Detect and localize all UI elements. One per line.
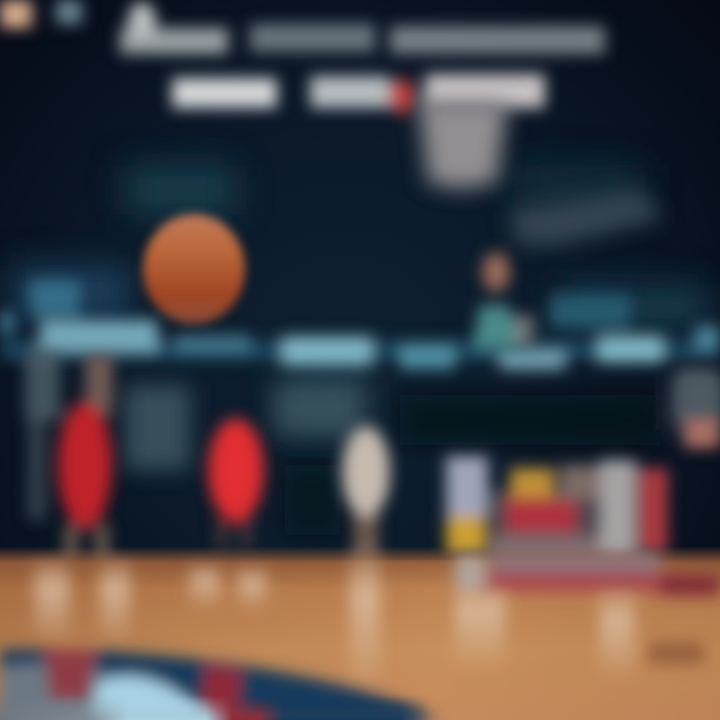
wooden court floor (0, 546, 720, 720)
lower stand panels (125, 370, 720, 535)
player in red, centre (208, 418, 264, 550)
basketball (143, 214, 245, 324)
title: illegible blurred headline (120, 2, 605, 114)
corner lights (0, 0, 82, 28)
seated figure (472, 252, 534, 350)
player in red, left (25, 350, 113, 565)
basketball hoop net (418, 100, 508, 188)
upper stand glow (10, 165, 710, 430)
right edge figure (678, 374, 720, 448)
light blue crowd band (0, 280, 720, 370)
group of players on right (446, 456, 668, 572)
player in white (342, 426, 390, 560)
court logo arc (0, 649, 440, 720)
blurred shape on right (510, 190, 665, 245)
